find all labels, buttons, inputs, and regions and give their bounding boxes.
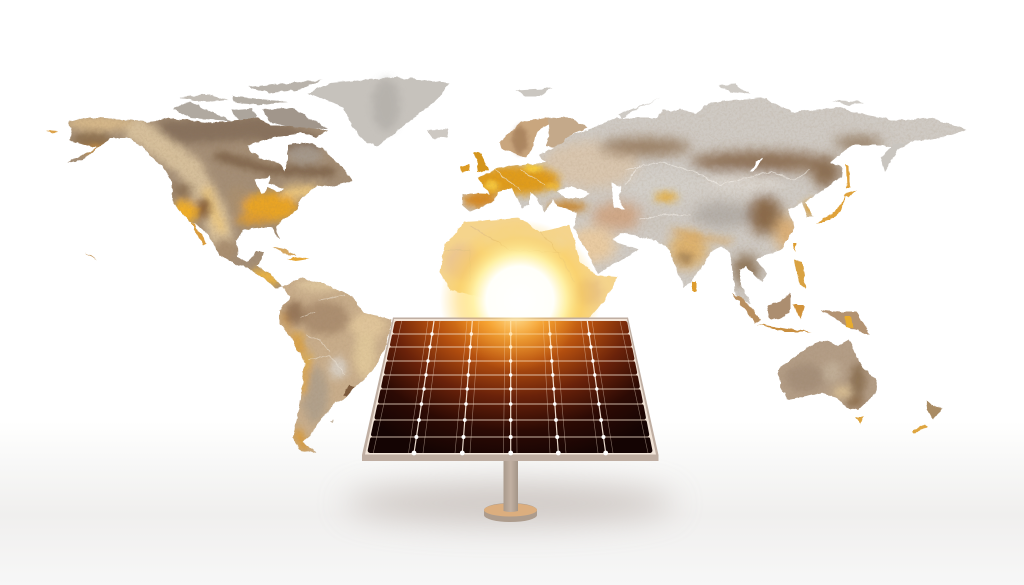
- map: Africa: [440, 218, 618, 322]
- sun flare over panel edge: [459, 318, 574, 367]
- map: Australia: [776, 338, 879, 412]
- panel junction dots: [412, 332, 608, 455]
- solar panel: [362, 318, 658, 522]
- map: New Zealand and Tasmania: [855, 401, 942, 433]
- panel post: [504, 460, 518, 510]
- sun glow: [440, 220, 600, 380]
- panel grid lines: [370, 321, 650, 453]
- map: Japan, Philippines and Southeast Asian islands: [692, 165, 870, 335]
- ground shadow: [345, 483, 675, 523]
- panel base: [484, 500, 537, 522]
- map: South America: [280, 278, 393, 454]
- panel cells: [370, 324, 650, 450]
- panel frame: [362, 318, 658, 461]
- icon: Black Sea and Caspian Sea: [556, 157, 763, 210]
- world map: [46, 77, 968, 454]
- icon: Great Lakes: [255, 176, 283, 195]
- map: Eurasia: [460, 96, 968, 304]
- icon: Baja California, Caribbean and Pacific islands: [46, 130, 335, 423]
- map: Kamchatka and Russian Arctic islands: [516, 84, 906, 172]
- map: North America: [64, 115, 354, 290]
- map: Scandinavia and British Isles: [460, 117, 588, 173]
- map: Arctic Canada and Greenland: [173, 77, 450, 147]
